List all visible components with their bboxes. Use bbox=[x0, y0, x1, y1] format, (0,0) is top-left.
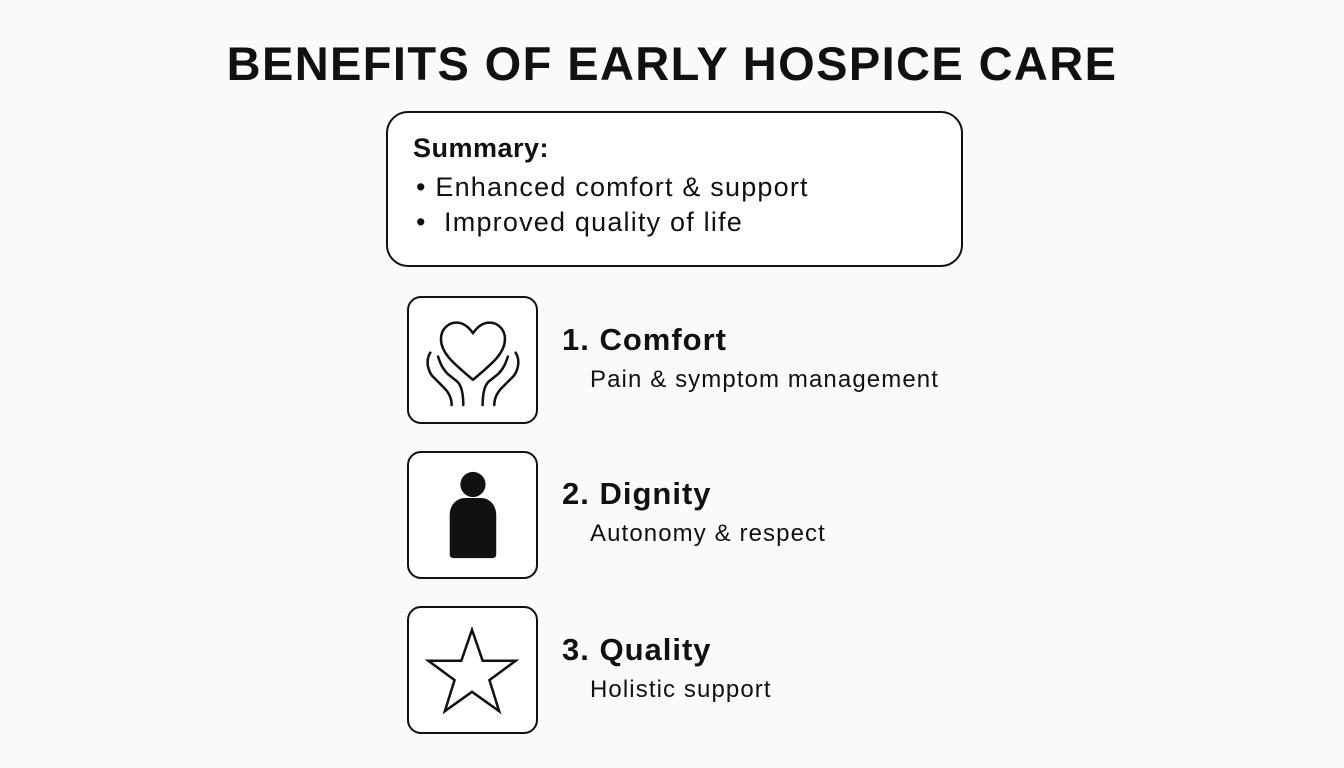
icon: heart in hands bbox=[407, 296, 538, 424]
heading: dignity: 2. Dignity bbox=[562, 476, 712, 511]
panel: summary bbox=[386, 111, 963, 267]
summary bullets: • Enhanced comfort & support bbox=[416, 172, 809, 202]
summary bullets: • Improved quality of life bbox=[416, 207, 743, 237]
heading: comfort: 1. Comfort bbox=[562, 322, 727, 357]
icon: star bbox=[407, 606, 538, 734]
title: BENEFITS OF EARLY HOSPICE CARE bbox=[227, 37, 1117, 90]
text: dignity: Autonomy & respect bbox=[590, 520, 826, 547]
heading: quality: 3. Quality bbox=[562, 632, 712, 667]
text: quality: Holistic support bbox=[590, 676, 772, 703]
summary bullets bbox=[416, 172, 809, 237]
icon: person bbox=[407, 451, 538, 579]
summary heading: Summary: bbox=[413, 133, 549, 163]
text: comfort: Pain & symptom management bbox=[590, 366, 939, 393]
